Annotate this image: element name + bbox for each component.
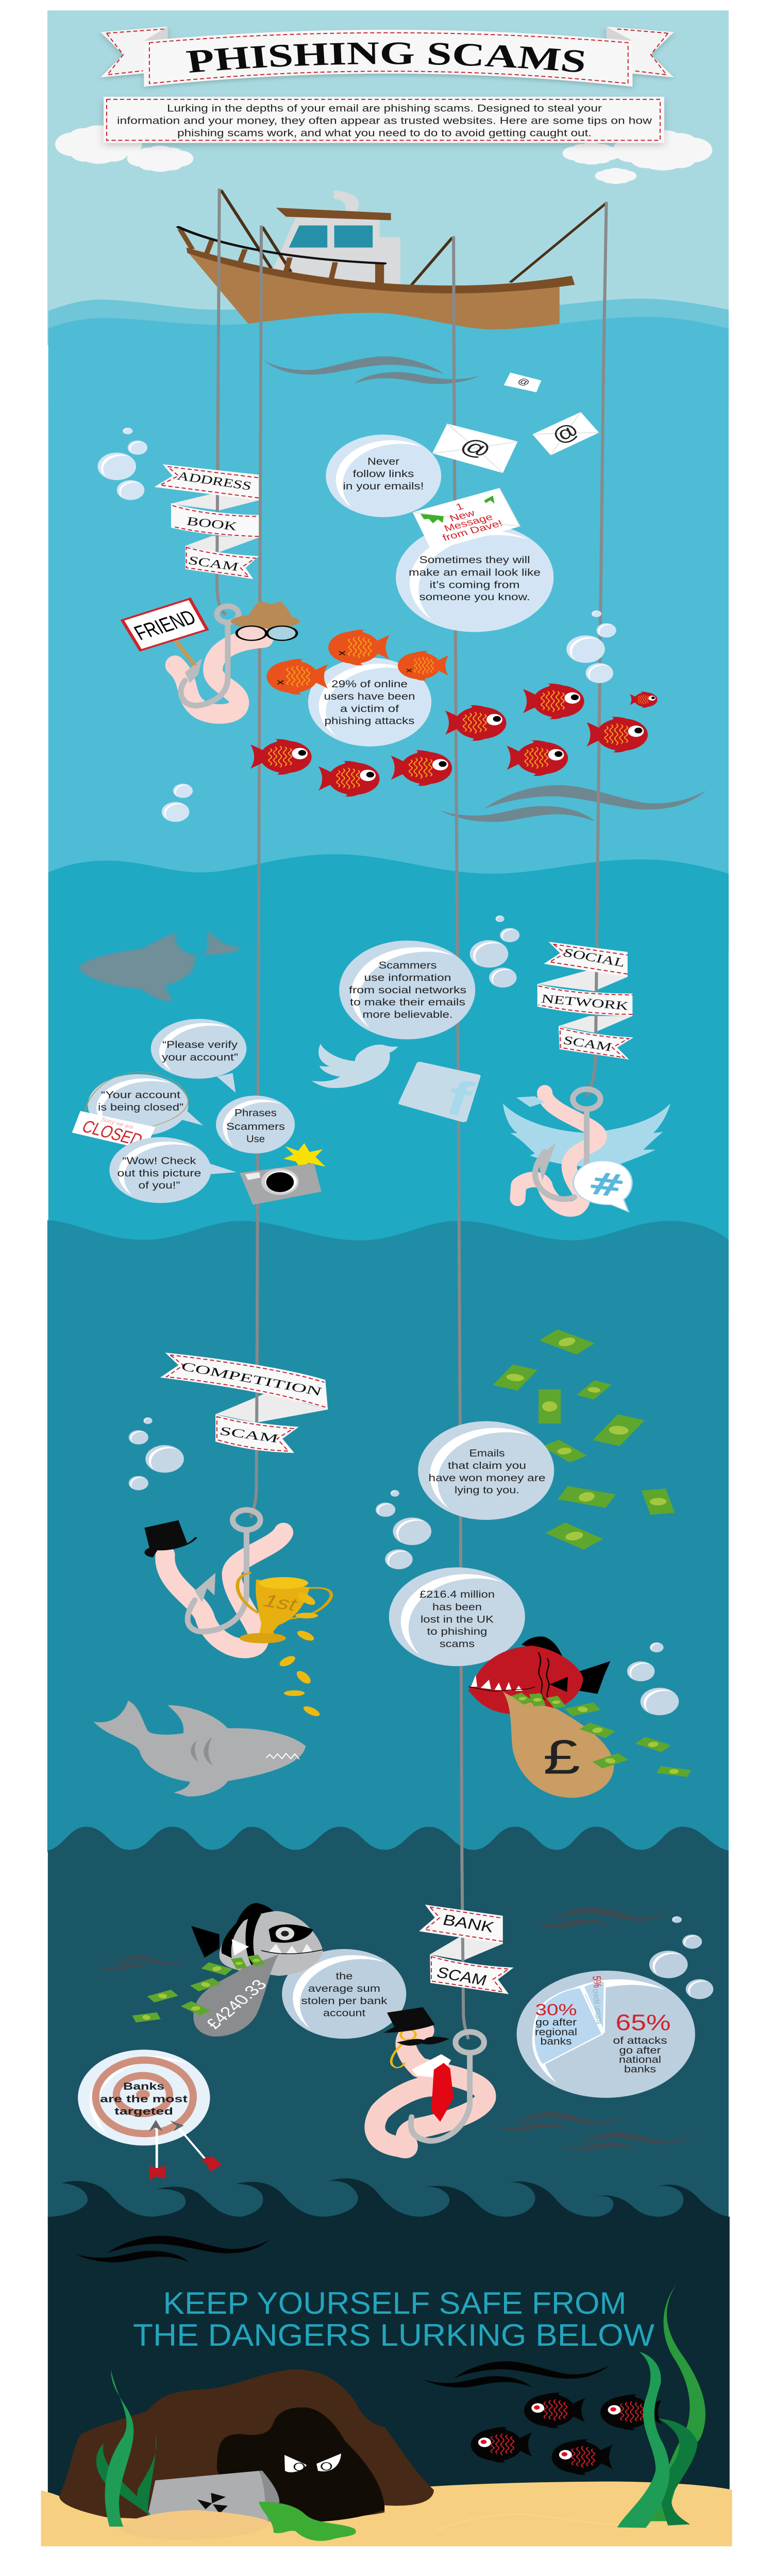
grey piranha with money bag: £4240.33	[202, 1977, 271, 2032]
speech bubble: wow check out: of you!”	[138, 1180, 180, 1191]
squiggle: surface current	[264, 357, 481, 384]
bubble: 216.4 million lost: to phishing	[427, 1626, 487, 1637]
closing message	[133, 2285, 654, 2352]
pie chart bubble: 30%	[535, 2001, 577, 2019]
ribbon folds	[170, 492, 632, 1960]
bubble: emails that claim	[418, 1421, 554, 1520]
bubble: phrases scammers use: Scammers	[226, 1121, 285, 1132]
speech bubble: account closed: “Your account	[101, 1089, 180, 1100]
speech bubble: wow check out: out this picture	[117, 1167, 201, 1178]
icon: facebook tile: f	[439, 1071, 479, 1127]
bubble: sometimes they will: someone you know.	[419, 591, 530, 602]
squiggles: black currents	[75, 2236, 609, 2387]
bubble: scammers use information: more believable.	[362, 1009, 452, 1020]
pie chart bubble: 65%	[616, 2010, 671, 2035]
bubble: 29 percent: phishing attacks	[325, 715, 415, 726]
pie chart bubble: of attacks	[613, 2035, 667, 2046]
bubble: sometimes they will: Sometimes they will	[419, 554, 530, 565]
red piranha with money bag	[468, 1636, 691, 1798]
target bubble with arrows: targeted	[114, 2106, 173, 2116]
bubble: 29 percent: a victim of	[340, 703, 399, 714]
red fish school	[250, 684, 658, 796]
ribbon: address book scam: BOOK	[186, 515, 238, 533]
pie chart bubble: credit unions	[590, 1989, 604, 2025]
bubbles beside scammers	[470, 916, 519, 988]
bubble: scammers use information: from social networks	[349, 985, 466, 995]
ribbon: social network scam	[537, 942, 633, 1059]
speech bubble: account closed	[88, 1074, 203, 1136]
bubble: 29 percent: users have been	[324, 691, 415, 702]
bubble: average sum stolen: average sum	[308, 1983, 380, 1994]
bubbles: below fish	[162, 784, 193, 822]
fishing lines	[217, 189, 607, 2039]
section: social network scam	[72, 916, 670, 1212]
bubble: sometimes they will: it’s coming from	[429, 579, 519, 590]
bubble: 29 percent	[308, 658, 431, 747]
intro text box	[104, 97, 664, 143]
sand mound and ripple	[119, 2510, 661, 2540]
wave: deepest water layer	[48, 2178, 730, 2526]
bubble: scammers use information	[339, 941, 475, 1039]
envelope: new message from Dave: New	[448, 508, 477, 523]
trophy with coins	[238, 1573, 331, 1717]
bubble: 29 percent: 29% of online	[331, 679, 408, 689]
section: competition scam	[94, 1329, 691, 1798]
sign: closed	[72, 1072, 188, 1150]
ribbon: competition scam: COMPETITION	[179, 1360, 324, 1399]
speech bubble: account closed: is being closed”	[98, 1101, 183, 1113]
pie chart bubble: go after	[535, 2016, 577, 2028]
sand floor	[41, 2482, 732, 2546]
icon: facebook tile	[402, 1063, 479, 1127]
cave with lurking eyes	[59, 2369, 434, 2523]
speech bubble: please verify: your account”	[162, 1052, 238, 1063]
bubble: phrases scammers use: Use	[246, 1133, 265, 1144]
pie chart bubble: banks	[624, 2063, 656, 2075]
bubbles left	[97, 428, 147, 500]
sign: closed: Sorry we are	[100, 1116, 135, 1130]
envelope: new message from Dave: 1	[454, 501, 465, 512]
bubble: never follow links	[326, 434, 441, 517]
bubble: never follow links: Never	[367, 456, 399, 467]
worm with wings and hash bubble: #	[584, 1165, 629, 1205]
bubble: scammers use information: use information	[364, 972, 451, 983]
bubble: 216.4 million lost: £216.4 million	[419, 1589, 495, 1600]
wave: back surface wave	[48, 299, 729, 403]
bubble: 216.4 million lost	[389, 1567, 525, 1666]
sign text: FRIEND	[130, 605, 200, 644]
wave: third water layer	[47, 1220, 729, 1852]
intro text box: information and your money, they often appear as trusted websites. Here are some tips on how	[117, 115, 652, 126]
bubble: emails that claim: have won money are	[428, 1472, 545, 1483]
falling banknotes	[493, 1329, 675, 1550]
squiggle: current right	[440, 785, 706, 822]
icon: twitter bird	[312, 1044, 398, 1088]
bubble: scammers use information: Scammers	[378, 960, 436, 971]
pie chart bubble: 5%	[590, 1975, 603, 1988]
seaweed right	[617, 2284, 705, 2528]
envelope: right	[532, 412, 599, 455]
ribbon: bank scam	[419, 1905, 514, 1994]
dead orange fish	[267, 630, 448, 694]
envelope: medium	[432, 423, 517, 473]
bubble: average sum stolen: account	[323, 2007, 365, 2019]
worm with wings and hash bubble	[503, 1089, 670, 1212]
bubbles right	[566, 611, 616, 683]
grey piranha with money bag	[132, 1903, 323, 2037]
target bubble with arrows: are the most	[100, 2093, 188, 2105]
ribbon: social network scam: SOCIAL	[562, 946, 627, 970]
pie chart bubble: regional	[535, 2026, 577, 2038]
section: address book scam	[97, 372, 658, 796]
pie chart bubble: banks	[540, 2036, 572, 2047]
radioactive barrel and slime	[148, 2470, 356, 2541]
worm with bowler hat, moustache, tie	[375, 2007, 485, 2148]
ribbon: address book scam	[154, 464, 259, 579]
wave: front surface water	[48, 313, 729, 950]
shadow shark	[79, 930, 240, 1002]
bubbles right of piranha	[627, 1642, 679, 1715]
envelope: new message from Dave: from Dave!	[441, 518, 505, 543]
bubbles left of worm	[129, 1417, 184, 1490]
section: bank scam	[78, 1903, 713, 2180]
bubbles right	[649, 1916, 713, 1999]
squiggles	[96, 1907, 693, 2150]
ribbon: social network scam: NETWORK	[540, 992, 630, 1013]
envelope: new message from Dave: Message	[442, 512, 495, 534]
bubble: average sum stolen: stolen per bank	[301, 1995, 388, 2006]
bubble: sometimes they will: make an email look like	[409, 567, 541, 578]
bubbles beside emails	[376, 1490, 431, 1569]
wave: second water layer	[48, 854, 729, 1314]
intro text box: Lurking in the depths of your email are phishing scams. Designed to steal your	[167, 103, 602, 114]
bubble: 216.4 million lost: has been	[432, 1601, 482, 1613]
pie chart bubble: go after	[619, 2044, 661, 2056]
ribbon: competition scam: SCAM	[218, 1425, 280, 1446]
sign: closed: CLOSED	[79, 1116, 146, 1150]
grey shark	[94, 1701, 306, 1797]
worm with top hat and hook	[144, 1510, 283, 1649]
bubble: emails that claim: lying to you.	[455, 1484, 519, 1496]
speech bubble: please verify: “Please verify	[162, 1039, 238, 1050]
envelope: medium: @	[456, 433, 496, 463]
section: seabed and closing message	[41, 2236, 732, 2546]
ribbon: address book scam: ADDRESS	[176, 469, 253, 493]
ribbon: social network scam: SCAM	[562, 1033, 613, 1054]
title banner	[100, 27, 675, 90]
dark fish school	[471, 2393, 662, 2475]
pie chart bubble	[517, 1971, 695, 2098]
envelope: right: @	[546, 419, 585, 448]
bubble: 216.4 million lost: lost in the UK	[421, 1614, 494, 1625]
bubble: phrases scammers use: Phrases	[234, 1107, 277, 1118]
target bubble with arrows: Banks	[123, 2081, 164, 2092]
bubble: average sum stolen: the	[335, 1971, 352, 1981]
worm with hat, glasses and friend sign	[122, 599, 300, 714]
bubble: sometimes they will	[396, 523, 553, 632]
clouds	[55, 125, 712, 184]
speech bubble: wow check out	[109, 1137, 237, 1203]
speech bubble: wow check out: “Wow! Check	[123, 1155, 196, 1166]
bubble: 216.4 million lost: scams	[440, 1638, 475, 1649]
seaweed left	[96, 2370, 157, 2527]
target bubble with arrows	[78, 2049, 222, 2180]
bubble: emails that claim: Emails	[469, 1448, 505, 1459]
bubble: never follow links: follow links	[352, 468, 414, 479]
bubble: average sum stolen	[282, 1949, 406, 2039]
wave: fourth water layer	[48, 1827, 729, 2224]
illustration: fishing boat	[178, 190, 607, 332]
ribbon: address book scam: SCAM	[187, 554, 240, 574]
icon: camera with flash	[240, 1143, 325, 1205]
red piranha with money bag: £	[543, 1730, 580, 1784]
ribbon: competition scam	[160, 1352, 328, 1453]
bubble: phrases scammers use	[216, 1095, 295, 1154]
ribbon: bank scam: BANK	[441, 1911, 496, 1936]
closing message: KEEP YOURSELF SAFE FROM	[163, 2285, 626, 2320]
ribbon: bank scam: SCAM	[434, 1964, 489, 1989]
bubble: never follow links: in your emails!	[343, 480, 424, 492]
bubble: scammers use information: to make their emails	[350, 996, 465, 1008]
title text: PHISHING SCAMS	[186, 42, 584, 73]
pie chart bubble: national	[619, 2054, 661, 2065]
envelope: small	[504, 372, 541, 392]
panel: sky background	[47, 10, 729, 345]
intro text box: phishing scams work, and what you need to do to avoid getting caught out.	[177, 127, 592, 139]
speech bubble: please verify	[151, 1019, 246, 1093]
envelope: new message from Dave	[413, 488, 520, 551]
bubble: emails that claim: that claim you	[448, 1460, 526, 1471]
trophy with coins: 1st	[261, 1590, 300, 1615]
envelope: small: @	[516, 377, 531, 388]
